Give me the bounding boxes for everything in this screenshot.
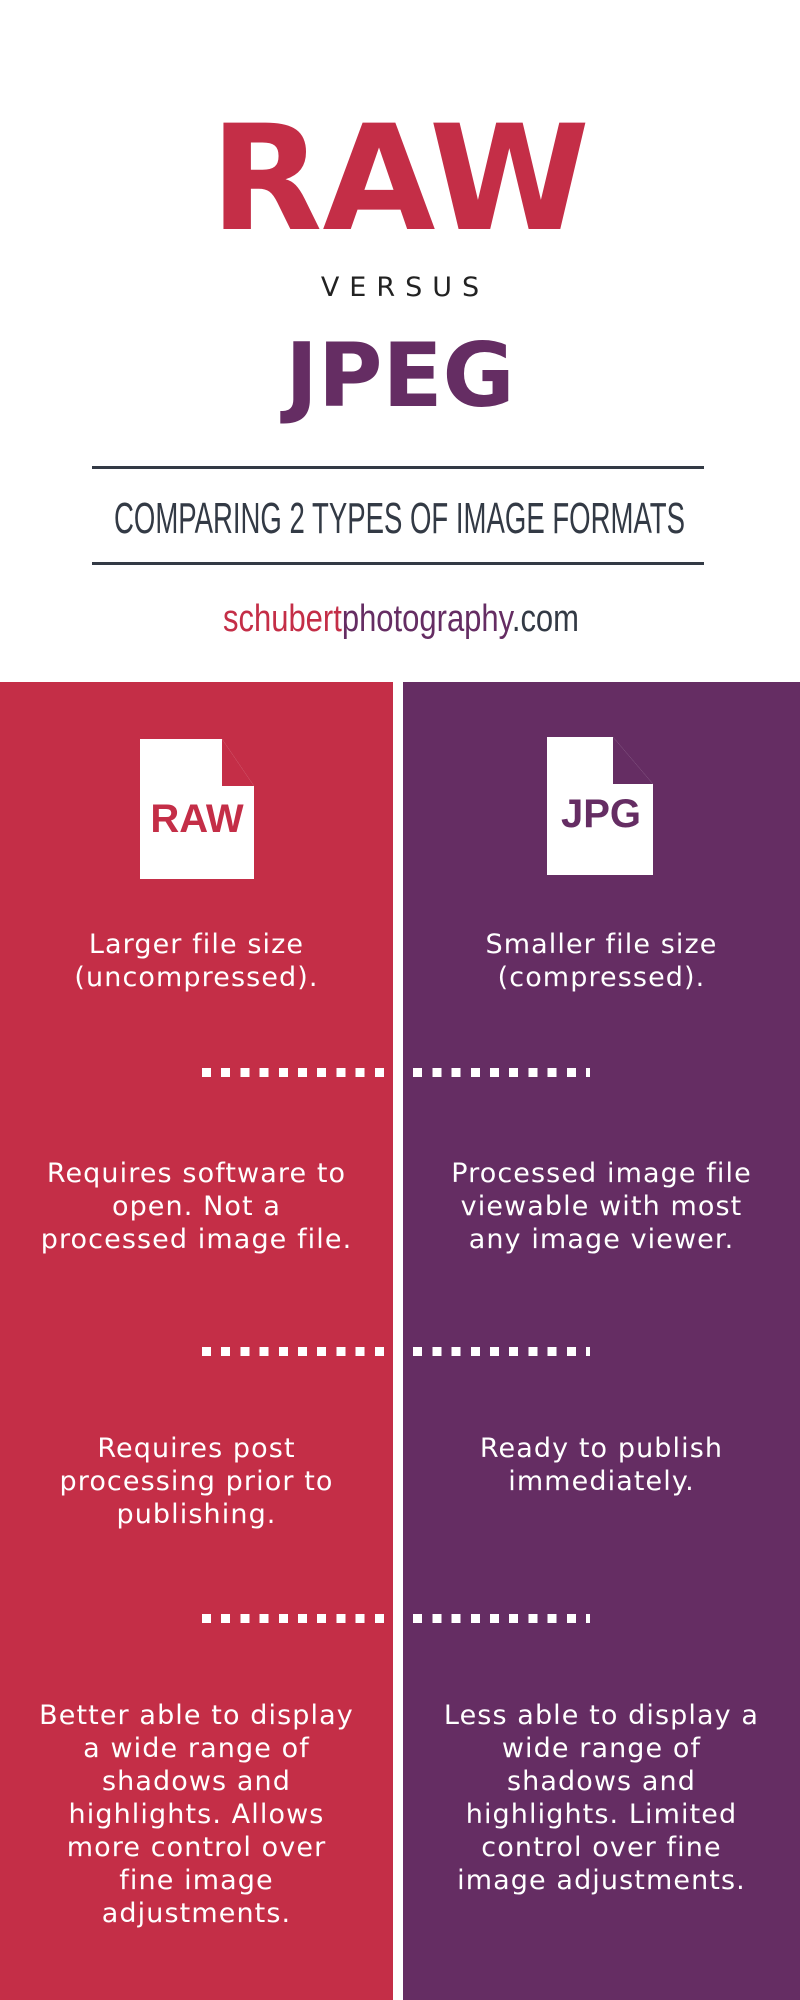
website: schubertphotography.com bbox=[223, 598, 579, 640]
text: jpeg 1: (compressed). bbox=[498, 962, 705, 993]
text: jpeg 3: immediately. bbox=[508, 1466, 695, 1497]
text: jpeg 3 bbox=[480, 1433, 723, 1497]
icon: RAW file bbox=[140, 739, 254, 879]
text: raw 4 bbox=[39, 1700, 354, 1929]
rule bottom bbox=[92, 562, 704, 565]
text: jpeg 4: shadows and bbox=[507, 1766, 696, 1797]
text: raw 2 bbox=[41, 1158, 352, 1255]
text: jpeg 1: Smaller file size bbox=[485, 929, 718, 960]
text: jpeg 4: Less able to display a bbox=[444, 1700, 759, 1731]
icon: JPG file: JPG bbox=[561, 792, 641, 836]
panel: RAW column bbox=[0, 682, 393, 2000]
text: raw 2: Requires software to bbox=[47, 1158, 346, 1189]
text: raw 4: highlights. Allows bbox=[69, 1799, 324, 1830]
subtitle: versus: VERSUS bbox=[321, 272, 489, 303]
text: jpeg 4 bbox=[444, 1700, 759, 1896]
text: raw 4: Better able to display bbox=[39, 1700, 354, 1731]
text: jpeg 4: highlights. Limited bbox=[466, 1799, 737, 1830]
text: raw 1 bbox=[74, 929, 319, 993]
icon: JPG file bbox=[547, 737, 653, 875]
text: jpeg 2 bbox=[451, 1158, 752, 1255]
text: raw 2: open. Not a bbox=[112, 1191, 281, 1222]
text: raw 3 bbox=[59, 1433, 334, 1530]
panel: JPEG column bbox=[403, 682, 800, 2000]
text: raw 3: publishing. bbox=[116, 1499, 276, 1530]
text: raw 2: processed image file. bbox=[41, 1224, 352, 1255]
text: jpeg 1 bbox=[485, 929, 718, 993]
text: raw 1: Larger file size bbox=[89, 929, 304, 960]
text: raw 3: processing prior to bbox=[59, 1466, 334, 1497]
text: jpeg 4: image adjustments. bbox=[457, 1865, 746, 1896]
text: raw 3: Requires post bbox=[97, 1433, 296, 1464]
text: raw 4: fine image bbox=[119, 1865, 274, 1896]
text: jpeg 2: Processed image file bbox=[451, 1158, 752, 1189]
text: raw 4: a wide range of bbox=[83, 1733, 310, 1764]
text: raw 4: more control over bbox=[67, 1832, 326, 1863]
text: raw 4: adjustments. bbox=[102, 1898, 291, 1929]
text: jpeg 4: control over fine bbox=[481, 1832, 722, 1863]
title: RAW: RAW bbox=[210, 94, 590, 264]
text: jpeg 3: Ready to publish bbox=[480, 1433, 723, 1464]
icon: RAW file: RAW bbox=[150, 797, 244, 841]
text: raw 4: shadows and bbox=[102, 1766, 291, 1797]
text: raw 1: (uncompressed). bbox=[74, 962, 319, 993]
rule top bbox=[92, 466, 704, 469]
title: JPEG: JPEG bbox=[285, 324, 515, 427]
text: jpeg 2: any image viewer. bbox=[469, 1224, 734, 1255]
text: jpeg 4: wide range of bbox=[502, 1733, 701, 1764]
text: jpeg 2: viewable with most bbox=[461, 1191, 742, 1222]
